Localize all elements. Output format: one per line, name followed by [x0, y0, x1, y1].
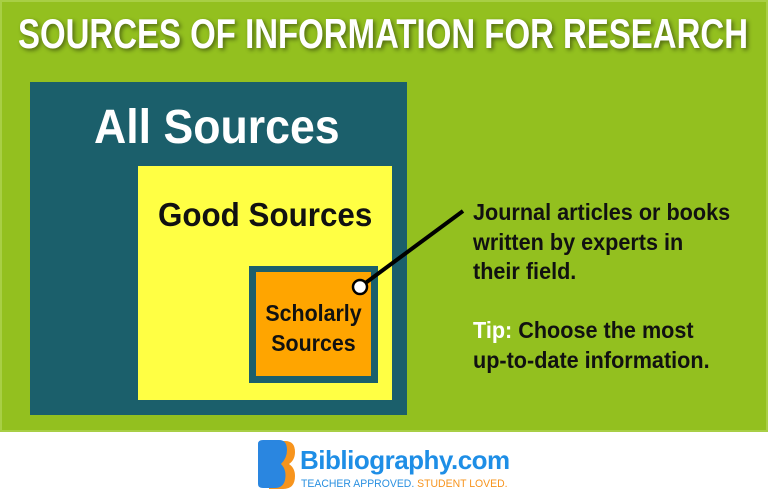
icon: logo: [258, 440, 295, 489]
panel: scholarly sources: [249, 266, 378, 383]
text block: description: their field.: [473, 258, 576, 284]
text: tagline: TEACHER APPROVED. STUDENT LOVED.: [301, 478, 508, 490]
text: brand: Bibliography.com: [300, 445, 510, 475]
panel: good sources: [138, 166, 392, 400]
text block: description: Tip: Choose the most: [473, 317, 694, 343]
heading: scholarly sources: Scholarly: [265, 300, 362, 326]
text block: description: written by experts in: [473, 228, 683, 254]
heading: good sources: Good Sources: [158, 196, 372, 233]
heading: scholarly sources: Sources: [271, 330, 356, 356]
panel: all sources: [30, 82, 407, 415]
text block: description: Journal articles or books: [473, 199, 730, 225]
text block: description: [473, 199, 730, 373]
text block: description: up-to-date information.: [473, 346, 710, 372]
heading: all sources: All Sources: [94, 101, 340, 154]
heading: scholarly sources: [265, 300, 362, 356]
